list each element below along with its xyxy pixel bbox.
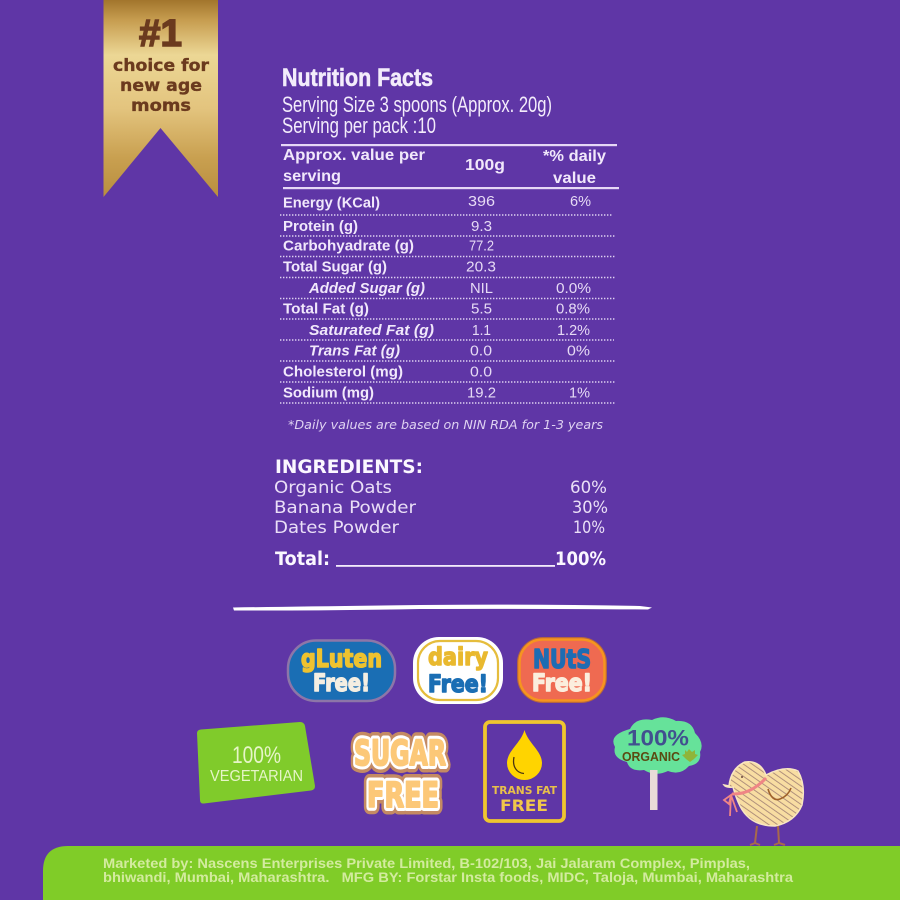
badge: sugar free xyxy=(354,734,446,816)
table header: serving xyxy=(283,168,341,185)
row: added sugar: Added Sugar (g) xyxy=(308,280,425,297)
heading: nutrition facts: Nutrition Facts xyxy=(282,64,433,92)
row: carbohydrate: 77.2 xyxy=(469,238,494,254)
ingredients xyxy=(274,457,608,570)
footer band xyxy=(43,846,900,900)
badge: 100% vegetarian: VEGETARIAN xyxy=(210,768,303,785)
ribbon: #1 choice for new age moms: #1 xyxy=(139,13,182,55)
badge: trans fat free: TRANS FAT xyxy=(492,785,558,797)
row: trans fat xyxy=(309,342,590,360)
heading: nutrition facts: Serving Size 3 spoons (Approx. 20g) xyxy=(282,92,552,117)
badge: gluten free xyxy=(288,640,395,701)
table header: value xyxy=(553,170,596,187)
badge: gluten free: Free! xyxy=(313,669,370,697)
badge: 100% organic: ORGANIC xyxy=(622,749,681,764)
ingredients: 10% xyxy=(573,518,605,538)
row: total fat: 5.5 xyxy=(471,302,492,318)
badge: dairy free: Free! xyxy=(428,670,488,698)
badge: trans fat free xyxy=(485,722,564,821)
row: energy: 6% xyxy=(570,194,591,210)
row: energy: Energy (KCal) xyxy=(283,194,380,212)
row: added sugar: NIL xyxy=(470,281,493,297)
table header xyxy=(283,147,606,187)
badge: sugar free: FREE xyxy=(367,776,439,816)
row: cholesterol xyxy=(283,364,492,380)
footnote: *Daily values are based on NIN RDA for 1-3 years xyxy=(288,417,603,432)
row: sodium: 19.2 xyxy=(467,386,496,402)
row: trans fat: 0% xyxy=(567,344,590,360)
table header: Approx. value per xyxy=(283,147,425,164)
row: sodium: 1% xyxy=(569,386,590,402)
row: total fat: 0.8% xyxy=(556,302,590,318)
row: energy xyxy=(283,194,591,212)
ingredients: Total: xyxy=(275,549,330,570)
badge: 100% organic xyxy=(613,717,702,810)
row: total fat: Total Fat (g) xyxy=(283,300,369,318)
ingredients: Dates Powder xyxy=(274,518,399,538)
footer address text xyxy=(103,855,793,885)
table header: *% daily xyxy=(543,148,606,165)
badge: sugar free: SUGAR xyxy=(354,734,446,774)
row: protein xyxy=(283,218,492,235)
badge: nuts free xyxy=(517,637,607,703)
row: total sugar: 20.3 xyxy=(466,260,496,276)
badge: nuts free: NUtS xyxy=(533,645,591,675)
badge: sugar free: FREE xyxy=(367,776,439,816)
row: cholesterol: 0.0 xyxy=(470,364,492,380)
nutrition table xyxy=(280,144,619,403)
footer address text: bhiwandi, Mumbai, Maharashtra. MFG BY: Forstar Insta foods, MIDC, Taloja, Mumbai, Maharashtra xyxy=(103,869,793,885)
row: cholesterol: Cholesterol (mg) xyxy=(283,364,403,380)
row: total sugar: Total Sugar (g) xyxy=(283,258,387,276)
table header: 100g xyxy=(465,157,505,174)
row: sodium xyxy=(283,384,590,402)
row: protein: 9.3 xyxy=(471,219,492,235)
badge: sugar free: SUGAR xyxy=(354,734,446,774)
ingredients: INGREDIENTS: xyxy=(275,457,423,478)
ingredients: 30% xyxy=(572,498,608,518)
footer address text: Marketed by: Nascens Enterprises Private Limited, B-102/103, Jai Jalaram Complex, Pimplas, xyxy=(103,855,750,871)
badge: gluten free: gLuten xyxy=(301,644,382,673)
badge: 100% organic: 100% xyxy=(627,726,689,750)
row: energy: 396 xyxy=(468,194,495,210)
badge: 100% vegetarian: 100% xyxy=(232,742,281,769)
ingredients: 60% xyxy=(570,478,607,498)
row: sodium: Sodium (mg) xyxy=(283,384,374,402)
ribbon: #1 choice for new age moms: new age xyxy=(120,76,202,96)
row: saturated fat: Saturated Fat (g) xyxy=(309,322,434,339)
row: carbohydrate xyxy=(283,238,494,254)
ingredients: Banana Powder xyxy=(274,498,416,518)
ribbon: #1 choice for new age moms: choice for xyxy=(113,56,210,76)
white brush divider xyxy=(233,605,652,611)
badge: dairy free xyxy=(413,637,503,704)
badge: trans fat free: FREE xyxy=(500,796,548,815)
row: trans fat: Trans Fat (g) xyxy=(309,342,400,360)
row: trans fat: 0.0 xyxy=(470,344,492,360)
ribbon: #1 choice for new age moms: moms xyxy=(131,96,191,116)
row: total sugar xyxy=(283,258,496,276)
badge: 100% vegetarian xyxy=(197,722,315,804)
row: added sugar: 0.0% xyxy=(556,281,591,297)
row: total fat xyxy=(283,300,590,318)
ingredients: Organic Oats xyxy=(274,478,392,498)
heading: nutrition facts xyxy=(282,64,552,138)
heading: nutrition facts: Serving per pack :10 xyxy=(282,113,436,138)
illustration: chick xyxy=(724,762,803,845)
ingredients: 100% xyxy=(555,549,606,570)
row: added sugar xyxy=(308,280,591,297)
row: carbohydrate: Carbohyadrate (g) xyxy=(283,238,414,254)
badge: dairy free: dairy xyxy=(428,643,488,671)
badge: sugar free: SUGAR xyxy=(354,734,446,774)
row: protein: Protein (g) xyxy=(283,218,358,235)
row: saturated fat: 1.1 xyxy=(472,323,491,339)
row: saturated fat: 1.2% xyxy=(557,323,590,339)
badge: nuts free: Free! xyxy=(532,669,592,697)
ribbon: #1 choice for new age moms xyxy=(104,0,218,197)
badge: sugar free: FREE xyxy=(367,776,439,816)
row: saturated fat xyxy=(309,322,590,339)
